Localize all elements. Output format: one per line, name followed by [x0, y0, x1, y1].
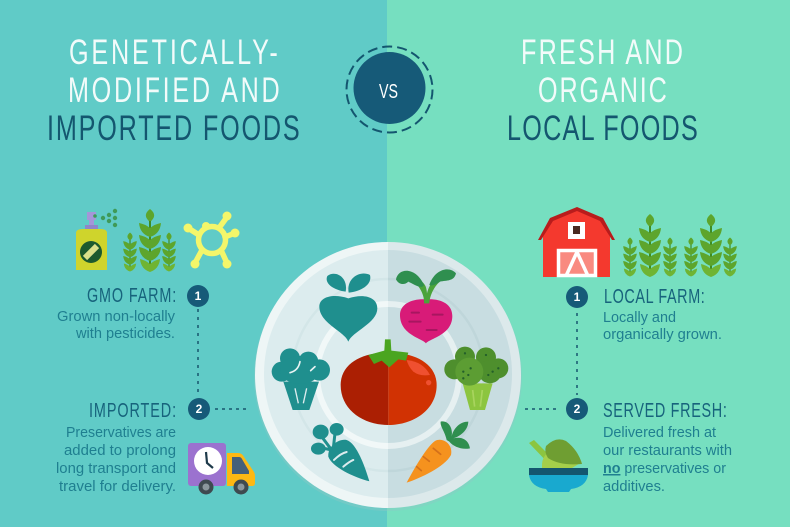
text: served fresh description: our restaurants with — [603, 442, 732, 459]
text: served fresh description: Delivered fresh at — [603, 424, 717, 441]
text: imported description — [56, 424, 176, 495]
title: fresh and organic local foods: LOCAL FOODS — [507, 109, 698, 148]
background: right panel — [387, 0, 790, 527]
title: fresh and organic local foods: FRESH AND — [521, 33, 683, 72]
text: served fresh description: no preservatives or — [603, 460, 726, 477]
icon: green broccoli — [444, 347, 508, 410]
text: gmo farm description: Grown non-locally — [57, 308, 175, 325]
heading: local farm: LOCAL FARM: — [604, 285, 705, 308]
text: gmo farm description: with pesticides. — [75, 325, 175, 342]
right connector with number badges: 1 — [574, 290, 581, 304]
text: served fresh description — [603, 424, 732, 495]
text: imported description: long transport and — [56, 460, 176, 477]
text: local farm description: organically grown. — [603, 326, 722, 343]
text: served fresh description: additives. — [603, 478, 665, 495]
text: gmo farm description — [57, 308, 175, 342]
text: imported description: travel for delivery. — [59, 478, 176, 495]
text: imported description: Preservatives are — [66, 424, 176, 441]
title: genetically-modified and imported foods: MODIFIED AND — [68, 71, 280, 110]
title: fresh and organic local foods: ORGANIC — [538, 71, 667, 110]
text: imported description: added to prolong — [64, 442, 176, 459]
icon: orange carrot — [407, 421, 470, 483]
icon: salad bowl — [529, 439, 588, 492]
icon: molecule — [184, 212, 240, 268]
right connector with number badges — [525, 286, 588, 420]
vs badge: VS — [379, 81, 398, 103]
icon: red barn — [538, 207, 615, 277]
background: left panel — [0, 0, 387, 527]
icon: teal turnip — [319, 274, 377, 342]
title: fresh and organic local foods — [507, 33, 698, 148]
icon: delivery truck — [188, 443, 255, 494]
right connector with number badges: 2 — [574, 402, 581, 416]
icon: teal carrot — [311, 423, 369, 481]
icon: right wheat — [623, 214, 737, 277]
text: local farm description — [603, 309, 722, 343]
title: genetically-modified and imported foods — [47, 33, 300, 148]
plate — [254, 242, 522, 511]
heading: imported: IMPORTED: — [89, 399, 176, 422]
title: genetically-modified and imported foods: GENETICALLY- — [69, 33, 278, 72]
icon: tomato — [341, 339, 437, 425]
icon: left wheat — [123, 209, 176, 272]
icon: teal broccoli — [272, 348, 330, 410]
vs badge — [346, 46, 432, 132]
icon: beet — [396, 269, 456, 343]
left connector with number badges: 2 — [196, 402, 203, 416]
icon: pesticide spray can — [76, 209, 117, 270]
left connector with number badges: 1 — [195, 289, 202, 303]
heading: served fresh: SERVED FRESH: — [603, 399, 727, 422]
plate food icons — [272, 269, 508, 483]
heading: gmo farm: GMO FARM: — [87, 284, 176, 307]
text: local farm description: Locally and — [603, 309, 676, 326]
left connector with number badges — [187, 285, 249, 420]
title: genetically-modified and imported foods: IMPORTED FOODS — [47, 109, 300, 148]
